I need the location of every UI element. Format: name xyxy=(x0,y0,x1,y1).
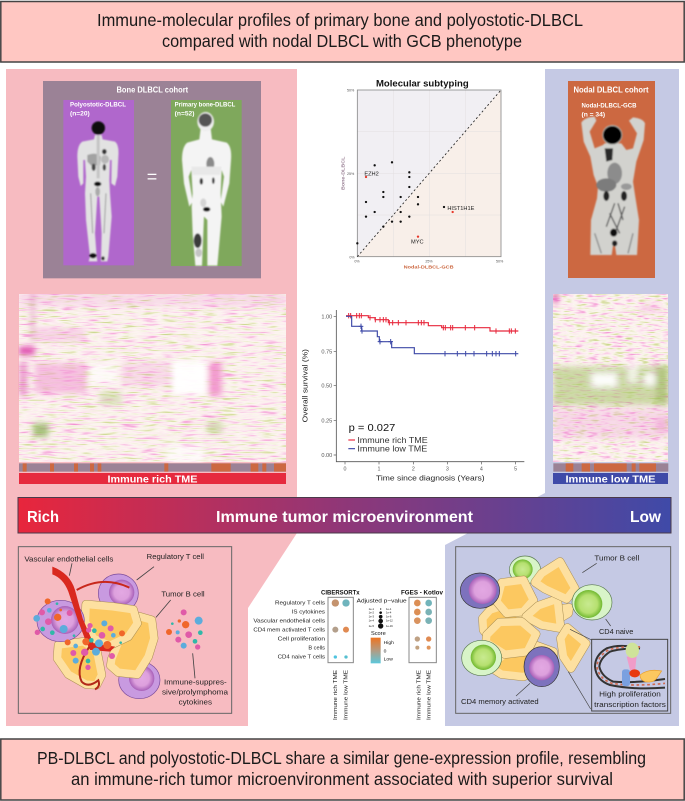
chart: overall survival: Time since diagnosis (Years) xyxy=(376,473,485,482)
label: immune rich TME xyxy=(19,473,286,486)
panel: immune rich illustration xyxy=(18,547,232,713)
label: immune rich TME: Immune rich TME xyxy=(108,474,198,486)
label: immune low TME: Immune low TME xyxy=(566,474,656,486)
leader lines xyxy=(516,563,611,709)
chart: overall survival: 0.00 xyxy=(321,453,332,459)
p-value and score legend: 1e-4 xyxy=(386,611,392,615)
labels: cytokines xyxy=(179,697,212,706)
chart: overall survival: Immune low TME xyxy=(357,445,427,454)
panel: molecular subtyping scatter plot: 0% xyxy=(349,256,355,260)
conclusion: an immune-rich tumor microenvironment associated with superior survival xyxy=(71,769,613,789)
p-value and score legend: 1e-16 xyxy=(386,624,393,628)
panel: molecular subtyping scatter plot: Nodal-DLBCL-GCB xyxy=(404,265,454,271)
chart: overall survival: 0.75 xyxy=(321,349,332,355)
regulatory T cell with cytokines xyxy=(37,600,84,642)
nodal scan xyxy=(581,117,645,255)
chart: overall survival: p = 0.027 xyxy=(349,423,395,434)
p-value and score legend: Adjusted p−value xyxy=(357,598,407,604)
panel: immune pathway bubble chart xyxy=(253,591,444,720)
annotation bar: nodal cohort xyxy=(553,463,668,472)
row labels: B cells xyxy=(308,645,325,651)
p-value and score legend: 0 xyxy=(384,648,387,654)
chart: overall survival: 0 xyxy=(344,466,347,472)
band: immune tumor microenvironment gradient: Low xyxy=(630,509,662,526)
primary bone scan: Primary bone-DLBCL xyxy=(175,102,235,109)
data points xyxy=(356,161,454,244)
curve: immune rich xyxy=(346,316,518,331)
primary bone scan xyxy=(171,100,242,266)
panel: immune rich background xyxy=(6,69,297,726)
panel: molecular subtyping scatter plot: 25% xyxy=(347,172,355,176)
panel: immune low background xyxy=(445,69,679,726)
tumor B cells xyxy=(483,562,586,677)
conclusion xyxy=(1,739,684,800)
band: immune tumor microenvironment gradient xyxy=(18,498,671,533)
title xyxy=(1,2,684,62)
panel: bone DLBCL cohort xyxy=(43,81,261,278)
labels: Tumor B cell xyxy=(161,590,205,599)
panel: nodal DLBCL cohort: Nodal DLBCL cohort xyxy=(574,86,649,94)
title: Immune-molecular profiles of primary bone and polyostotic-DLBCL xyxy=(97,10,583,30)
panel: molecular subtyping scatter plot: MYC xyxy=(411,240,424,246)
tumor B cells xyxy=(57,604,154,685)
chart: overall survival: Overall survival (%) xyxy=(300,349,309,422)
labels: Regulatory T cell xyxy=(147,552,204,561)
vessel xyxy=(52,567,115,652)
row labels xyxy=(253,600,325,660)
labels: Immune-suppres- xyxy=(164,677,227,686)
panel: immune low illustration xyxy=(456,547,671,713)
row labels: CD4 mem activated T cells xyxy=(253,627,325,633)
bubbles xyxy=(332,599,432,659)
band: immune tumor microenvironment gradient: Rich xyxy=(27,509,59,526)
leader lines xyxy=(69,563,195,678)
labels xyxy=(461,553,640,706)
panel: immune pathway bubble chart: CIBERSORTx xyxy=(321,591,360,597)
CD4 memory cells xyxy=(460,573,559,687)
p-value and score legend: 1e-3 xyxy=(369,615,375,619)
p-value and score legend: 1e-1 xyxy=(386,607,392,611)
panel: nodal DLBCL cohort: (n = 34) xyxy=(582,112,605,118)
labels: sive/prolymphoma xyxy=(162,687,229,696)
regulatory T cells xyxy=(98,574,160,699)
CD4 naive cell top xyxy=(509,556,541,584)
panel: molecular subtyping scatter plot: Molecular subtyping xyxy=(376,79,469,89)
chart: overall survival: Immune rich TME xyxy=(357,436,428,445)
column labels: Immune low TME xyxy=(427,670,433,720)
panel: immune pathway bubble chart: FGES - Kotlov xyxy=(401,591,444,597)
p-value and score legend: 1e-2 xyxy=(369,611,375,615)
column labels: Immune rich TME xyxy=(416,670,422,720)
p-value and score legend: High xyxy=(384,640,394,646)
panel: nodal DLBCL cohort xyxy=(568,81,655,278)
chart: overall survival: 0.25 xyxy=(321,418,332,424)
inset: transcription factors xyxy=(592,639,668,711)
heatmap: bone cohort xyxy=(19,292,286,463)
polyostotic scan: (n=20) xyxy=(70,110,90,117)
row labels: IS cytokines xyxy=(292,609,325,615)
p-value and score legend: 1e-6 xyxy=(386,615,392,619)
labels: Tumor B cell xyxy=(594,553,640,562)
CD4 naive cells xyxy=(462,585,612,676)
chart: overall survival xyxy=(300,310,524,482)
p-value and score legend: Low xyxy=(384,657,393,663)
labels: Vascular endothelial cells xyxy=(24,555,114,564)
panel: molecular subtyping scatter plot: 50% xyxy=(496,260,504,264)
p-value and score legend: 1e-5 xyxy=(369,624,375,628)
row labels: CD4 naive T cells xyxy=(278,654,325,660)
p-value and score legend: Score xyxy=(371,631,386,637)
row labels: Regulatory T cells xyxy=(275,600,325,606)
chart: overall survival: 2 xyxy=(412,466,415,472)
column labels: Immune rich TME xyxy=(333,670,339,720)
p-value and score legend xyxy=(357,598,407,663)
column labels xyxy=(333,670,433,720)
row labels: Vascular endothelial cells xyxy=(253,618,325,624)
panel: molecular subtyping scatter plot: Bone-DLBCL xyxy=(340,157,346,190)
panel: molecular subtyping scatter plot: EZH2 xyxy=(364,171,379,177)
chart: overall survival: 3 xyxy=(446,466,449,472)
chart: overall survival: 1.00 xyxy=(321,314,332,320)
inset: transcription factors: transcription factors xyxy=(594,700,666,709)
labels xyxy=(24,552,229,706)
p-value and score legend: 1e-4 xyxy=(369,619,375,623)
polyostotic scan xyxy=(63,100,134,265)
panel: bone DLBCL cohort: Bone DLBCL cohort xyxy=(116,85,188,94)
row labels: Cell proliferation xyxy=(278,636,325,642)
labels: CD4 naive xyxy=(599,627,633,636)
heatmap: nodal cohort xyxy=(553,293,668,462)
column labels: Immune low TME xyxy=(344,670,350,720)
equals sign: = xyxy=(147,167,157,187)
curve: immune low xyxy=(346,316,518,354)
chart: overall survival: 0.50 xyxy=(321,384,332,390)
chart: overall survival: 4 xyxy=(480,466,483,472)
polyostotic scan: Polyostotic-DLBCL xyxy=(70,102,126,109)
annotation bar: bone cohort xyxy=(19,463,286,472)
inset: transcription factors: High proliferation xyxy=(599,689,661,698)
cytokine dots xyxy=(33,598,203,670)
chart: overall survival: 1 xyxy=(378,466,381,472)
panel: nodal DLBCL cohort: Nodal-DLBCL-GCB xyxy=(582,102,637,110)
panel: molecular subtyping scatter plot: 0% xyxy=(354,260,360,264)
band: immune tumor microenvironment gradient: Immune tumor microenvironment xyxy=(216,509,474,526)
panel: molecular subtyping scatter plot: 25% xyxy=(425,260,433,264)
p-value and score legend: 1e-1 xyxy=(369,607,375,611)
p-value and score legend: 1e-12 xyxy=(386,619,393,623)
panel: molecular subtyping scatter plot xyxy=(340,79,504,271)
primary bone scan: (n=52) xyxy=(175,110,194,117)
title: compared with nodal DLBCL with GCB phenotype xyxy=(162,31,522,51)
labels: CD4 memory activated xyxy=(461,697,539,706)
panel: molecular subtyping scatter plot: 50% xyxy=(347,89,355,93)
chart: overall survival: 5 xyxy=(514,466,517,472)
panel: molecular subtyping scatter plot: HIST1H1E xyxy=(447,206,475,212)
